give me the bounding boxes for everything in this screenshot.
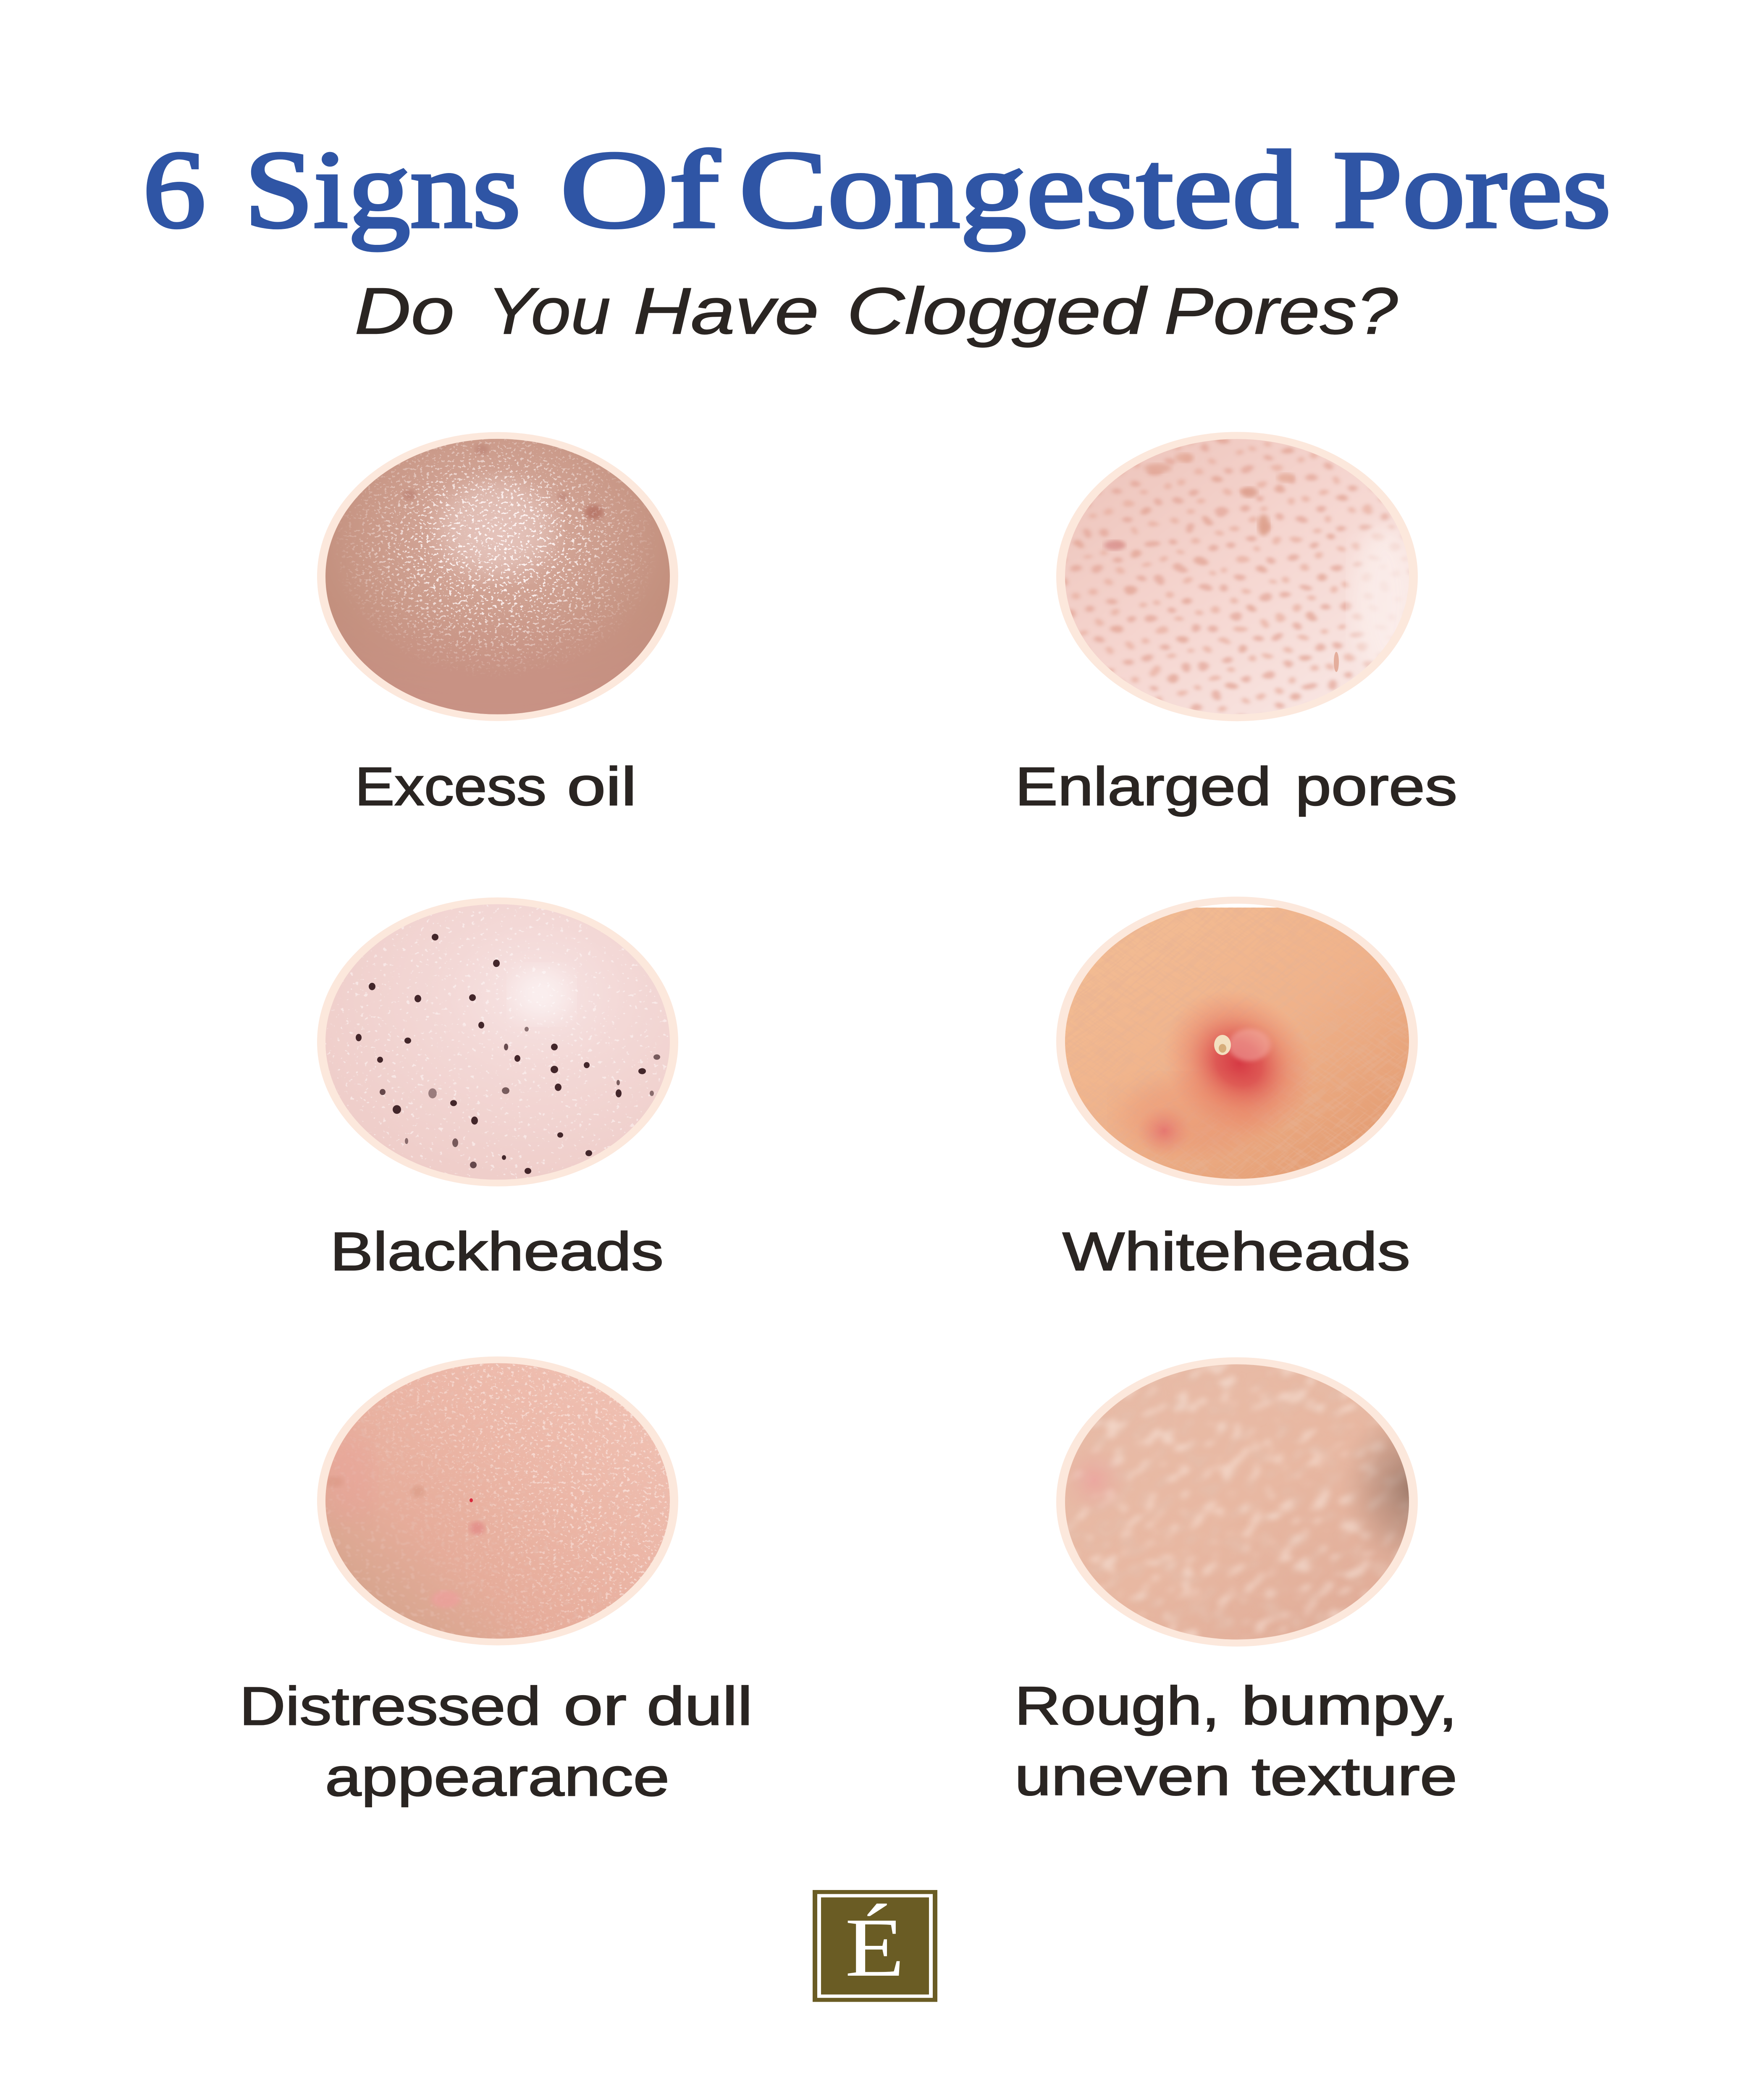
label: distressed or dull appearance: appearance [325, 1747, 669, 1807]
panel: distressed or dull appearance [239, 1357, 753, 1807]
title: 6 [143, 128, 206, 251]
icon: distressed skin circle [317, 1357, 678, 1646]
label: rough, bumpy, uneven texture: texture [1251, 1746, 1457, 1806]
label: blackheads: Blackheads [330, 1221, 664, 1281]
label: rough, bumpy, uneven texture: uneven [1015, 1746, 1231, 1806]
blackhead dots [356, 934, 660, 1174]
icon: rough bumpy skin circle [884, 1220, 1590, 1784]
label: distressed or dull appearance: Distressed [239, 1676, 541, 1736]
icon: blackheads skin circle [317, 898, 678, 1186]
panel: enlarged pores [1015, 405, 1457, 816]
subtitle: Do [354, 274, 454, 348]
icon: whiteheads skin circle [880, 756, 1593, 1326]
subtitle: Pores? [1164, 274, 1398, 348]
title: Of [560, 128, 721, 251]
whitehead [1214, 1035, 1231, 1055]
label: distressed or dull appearance: dull [647, 1676, 753, 1736]
label: excess oil: oil [567, 756, 637, 816]
label: enlarged pores: Enlarged [1015, 756, 1271, 816]
panel: whiteheads [880, 756, 1593, 1326]
subtitle: Clogged [847, 274, 1148, 348]
subtitle: Have [633, 274, 819, 348]
label: rough, bumpy, uneven texture: Rough, [1015, 1675, 1220, 1736]
label: rough, bumpy, uneven texture: bumpy, [1241, 1675, 1457, 1736]
panel: blackheads [317, 898, 678, 1281]
label: whiteheads: Whiteheads [1063, 1221, 1410, 1281]
label: enlarged pores: pores [1295, 756, 1457, 816]
icon: enlarged pores skin circle [1023, 405, 1451, 748]
label: excess oil: Excess [355, 756, 546, 816]
subtitle: You [487, 274, 611, 348]
title: Pores [1333, 128, 1611, 251]
icon: excess oil skin circle [317, 432, 678, 721]
panel: excess oil [317, 432, 678, 816]
logo [813, 1890, 937, 2002]
title: Congested [739, 128, 1299, 251]
title: Signs [244, 128, 521, 251]
logo: É [845, 1901, 905, 1994]
panel: rough, bumpy, uneven texture [884, 1220, 1590, 1806]
label: distressed or dull appearance: or [564, 1676, 627, 1736]
